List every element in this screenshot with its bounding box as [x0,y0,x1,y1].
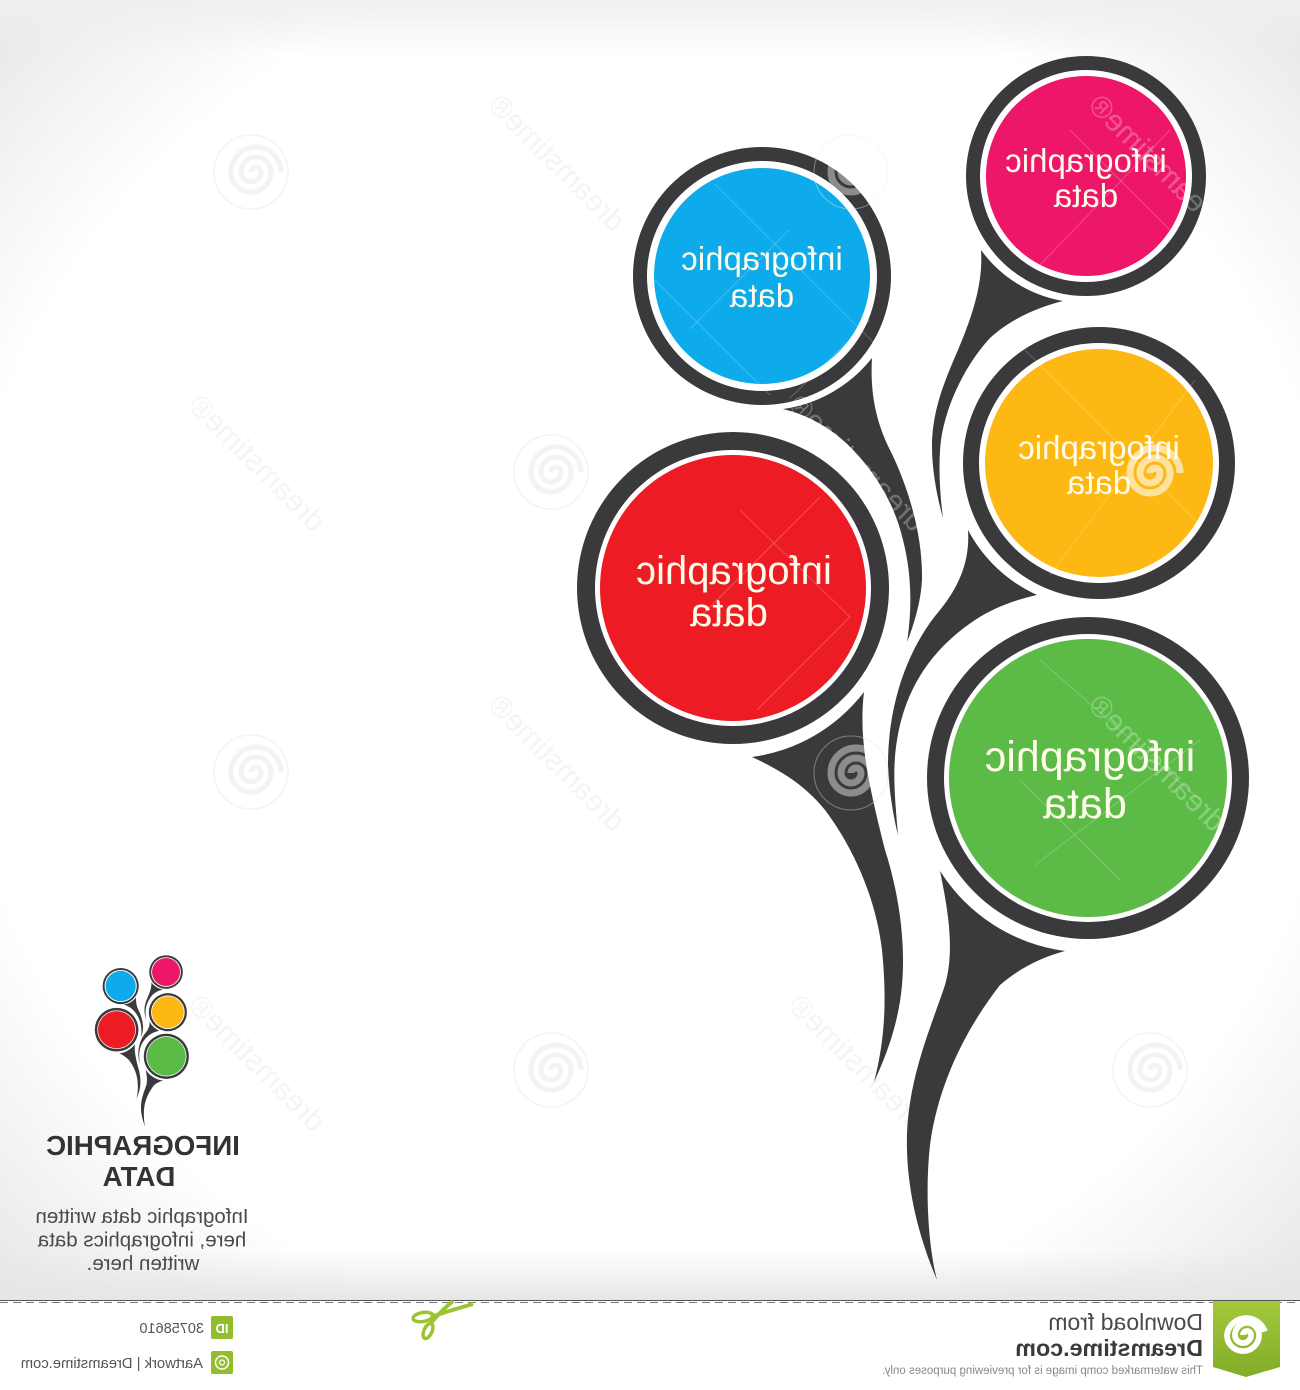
balloon: pink [966,56,1206,296]
icon: copyright badge [211,1351,233,1374]
stem: pink balloon [932,250,1063,518]
watermark wordmarks on balloons: dreamstime® [1082,688,1232,838]
download heading: Download from [1048,1309,1203,1335]
balloon: yellow: infographic [1018,429,1180,466]
stem: red balloon [752,692,903,1082]
watermark wordmarks: dreamstime® [482,688,632,838]
tree graphic [577,56,1249,1280]
balloon: pink: data [1053,177,1118,214]
watermark spirals on white [214,135,1187,1107]
logo title [46,1130,240,1192]
balloon: red: data [689,591,768,635]
balloon: red: infographic [636,549,832,593]
balloon: green [927,617,1249,939]
logo description: Infographic data written [35,1205,249,1228]
copyright credit: Aartwork | Dreamstime.com [21,1356,203,1372]
image id: 30758610 [139,1321,204,1337]
watermark wordmarks on balloons: dreamstime® [1082,88,1232,238]
logo title: INFOGRAPHIC [46,1130,240,1161]
logo description [35,1205,249,1275]
watermark wordmarks [182,88,932,1138]
balloon: yellow: data [1066,464,1131,501]
balloon: blue: data [729,277,794,314]
watermark spiral on yellow balloon [1130,448,1180,493]
dreamstime brand: Dreamstime.com [1015,1335,1203,1361]
watermark wordmarks: dreamstime® [482,88,632,238]
watermark wordmarks: dreamstime® [782,988,932,1138]
watermark spiral on blue balloon ring [814,135,888,209]
balloon: yellow [963,327,1235,599]
balloon: blue: infographic [681,240,843,277]
stem: blue balloon [783,358,922,642]
watermark wordmarks: dreamstime® [182,988,332,1138]
watermark wordmarks on balloons: dreamstime® [782,388,932,538]
balloon: red [577,432,889,744]
icon: scissors [412,1301,473,1340]
logo title: DATA [103,1161,175,1192]
small logo tree [95,955,189,1127]
stem: green balloon [907,871,1065,1280]
footer [0,1300,1300,1390]
balloon: blue [633,147,891,405]
watermark wordmarks on balloons [782,88,1232,838]
logo description: here, infographics data [37,1228,246,1252]
watermark overlays on the tree [655,130,1200,880]
watermark spiral on red stem [814,736,888,810]
icon: ID badge: ID [216,1321,228,1336]
balloon: pink: infographic [1005,142,1167,179]
logo description: written here. [87,1252,200,1275]
stem: yellow balloon [888,530,1037,835]
icon: ID badge [211,1316,233,1339]
balloon: green: infographic [985,733,1195,781]
watermark wordmarks: dreamstime® [182,388,332,538]
comp notice: This watermarked comp image is for previewing purposes only. [882,1365,1203,1377]
balloon: green: data [1043,780,1127,828]
icon: dreamstime ribbon [1213,1301,1280,1377]
